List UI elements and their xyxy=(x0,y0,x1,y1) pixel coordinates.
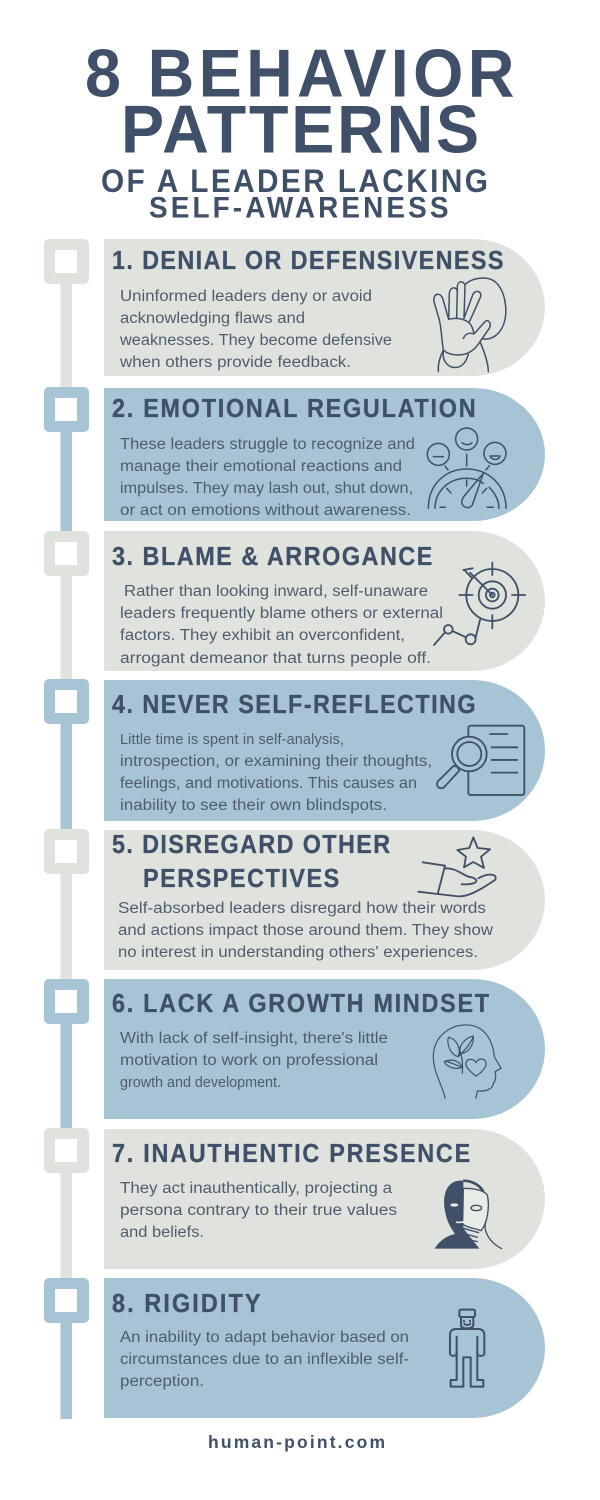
body 6 xyxy=(120,1030,388,1091)
panel 1: denial or defensiveness xyxy=(104,239,545,376)
body 8: circumstances due to an inflexible self- xyxy=(120,1351,409,1368)
icon: hand holding star xyxy=(418,837,496,896)
heading 7: 7. INAUTHENTIC PRESENCE xyxy=(112,1140,470,1168)
icon: head with leaves and heart xyxy=(433,1025,501,1098)
body 6: motivation to work on professional xyxy=(120,1052,378,1069)
body 4 xyxy=(120,732,432,814)
timeline node 7 xyxy=(44,1128,89,1281)
body 3 xyxy=(120,583,443,667)
body 2 xyxy=(120,436,415,519)
body 3: Rather than looking inward, self-unaware xyxy=(124,583,428,600)
heading 5: 5. DISREGARD OTHER xyxy=(112,831,390,859)
timeline node 3 xyxy=(44,531,89,683)
icon: rigid standing figure xyxy=(450,1310,484,1387)
timeline node 4 xyxy=(44,679,89,832)
body 7: and beliefs. xyxy=(120,1224,204,1241)
heading 5 xyxy=(112,831,390,893)
body 5: no interest in understanding others' experiences. xyxy=(118,944,478,961)
panel 4: never self-reflecting xyxy=(104,680,545,821)
body 7: persona contrary to their true values xyxy=(120,1202,397,1219)
body 2: or act on emotions without awareness. xyxy=(120,502,411,519)
timeline node 1 xyxy=(44,239,89,390)
body 3: factors. They exhibit an overconfident, xyxy=(120,627,405,644)
icon: face with mask xyxy=(435,1181,502,1249)
panel 5: disregard other perspectives xyxy=(104,830,545,970)
body 3: arrogant demeanor that turns people off. xyxy=(120,650,431,667)
timeline node 8 xyxy=(44,1278,89,1419)
body 5 xyxy=(118,900,494,961)
panel 3: blame and arrogance xyxy=(104,531,545,671)
body 1: acknowledging flaws and xyxy=(120,310,305,327)
timeline node 2 xyxy=(44,387,89,535)
body 3: leaders frequently blame others or external xyxy=(120,605,443,622)
heading 4: 4. NEVER SELF-REFLECTING xyxy=(112,691,476,719)
heading 1: 1. DENIAL OR DEFENSIVENESS xyxy=(112,247,504,275)
footer: website: human-point.com xyxy=(208,1432,385,1452)
icon: target and arrow xyxy=(434,563,525,645)
body 2: These leaders struggle to recognize and xyxy=(120,436,415,453)
body 1: Uninformed leaders deny or avoid xyxy=(120,288,372,305)
body 5: and actions impact those around them. They show xyxy=(118,922,494,939)
title xyxy=(85,36,514,168)
icon: magnifier over document xyxy=(437,726,524,795)
body 4: feelings, and motivations. This causes an xyxy=(120,775,417,792)
heading 3: 3. BLAME & ARROGANCE xyxy=(112,543,432,571)
panel 8: rigidity xyxy=(104,1278,545,1418)
heading 8: 8. RIGIDITY xyxy=(112,1290,261,1318)
timeline node 5 xyxy=(44,829,89,982)
heading 2: 2. EMOTIONAL REGULATION xyxy=(112,395,476,423)
title: 8 BEHAVIOR xyxy=(85,36,514,112)
panel 7: inauthentic presence xyxy=(104,1129,545,1269)
body 4: introspection, or examining their thoughts, xyxy=(120,753,432,770)
body 1: when others provide feedback. xyxy=(119,354,351,371)
body 4: inability to see their own blindspots. xyxy=(120,797,387,814)
body 2: impulses. They may lash out, shut down, xyxy=(120,480,413,497)
body 4: Little time is spent in self-analysis, xyxy=(120,732,344,748)
heading 6: 6. LACK A GROWTH MINDSET xyxy=(112,990,489,1018)
body 2: manage their emotional reactions and xyxy=(120,458,402,475)
body 6: growth and development. xyxy=(120,1075,281,1091)
body 1: weaknesses. They become defensive xyxy=(119,332,392,349)
subtitle: SELF-AWARENESS xyxy=(149,192,448,225)
body 1 xyxy=(119,288,392,371)
body 8 xyxy=(120,1329,409,1390)
panel 6: lack a growth mindset xyxy=(104,979,545,1119)
body 7: They act inauthentically, projecting a xyxy=(120,1180,392,1197)
body 7 xyxy=(120,1180,397,1241)
body 6: With lack of self-insight, there's little xyxy=(120,1030,388,1047)
timeline node 6 xyxy=(44,979,89,1132)
subtitle: OF A LEADER LACKING xyxy=(101,163,488,199)
icon: raised hand xyxy=(434,278,506,372)
subtitle xyxy=(101,163,488,225)
title: PATTERNS xyxy=(121,92,479,168)
heading 5: PERSPECTIVES xyxy=(143,865,339,893)
body 8: An inability to adapt behavior based on xyxy=(120,1329,409,1346)
body 8: perception. xyxy=(120,1373,204,1390)
icon: emotion gauge xyxy=(427,428,506,508)
body 5: Self-absorbed leaders disregard how their words xyxy=(118,900,486,917)
panel 2: emotional regulation xyxy=(104,388,545,521)
